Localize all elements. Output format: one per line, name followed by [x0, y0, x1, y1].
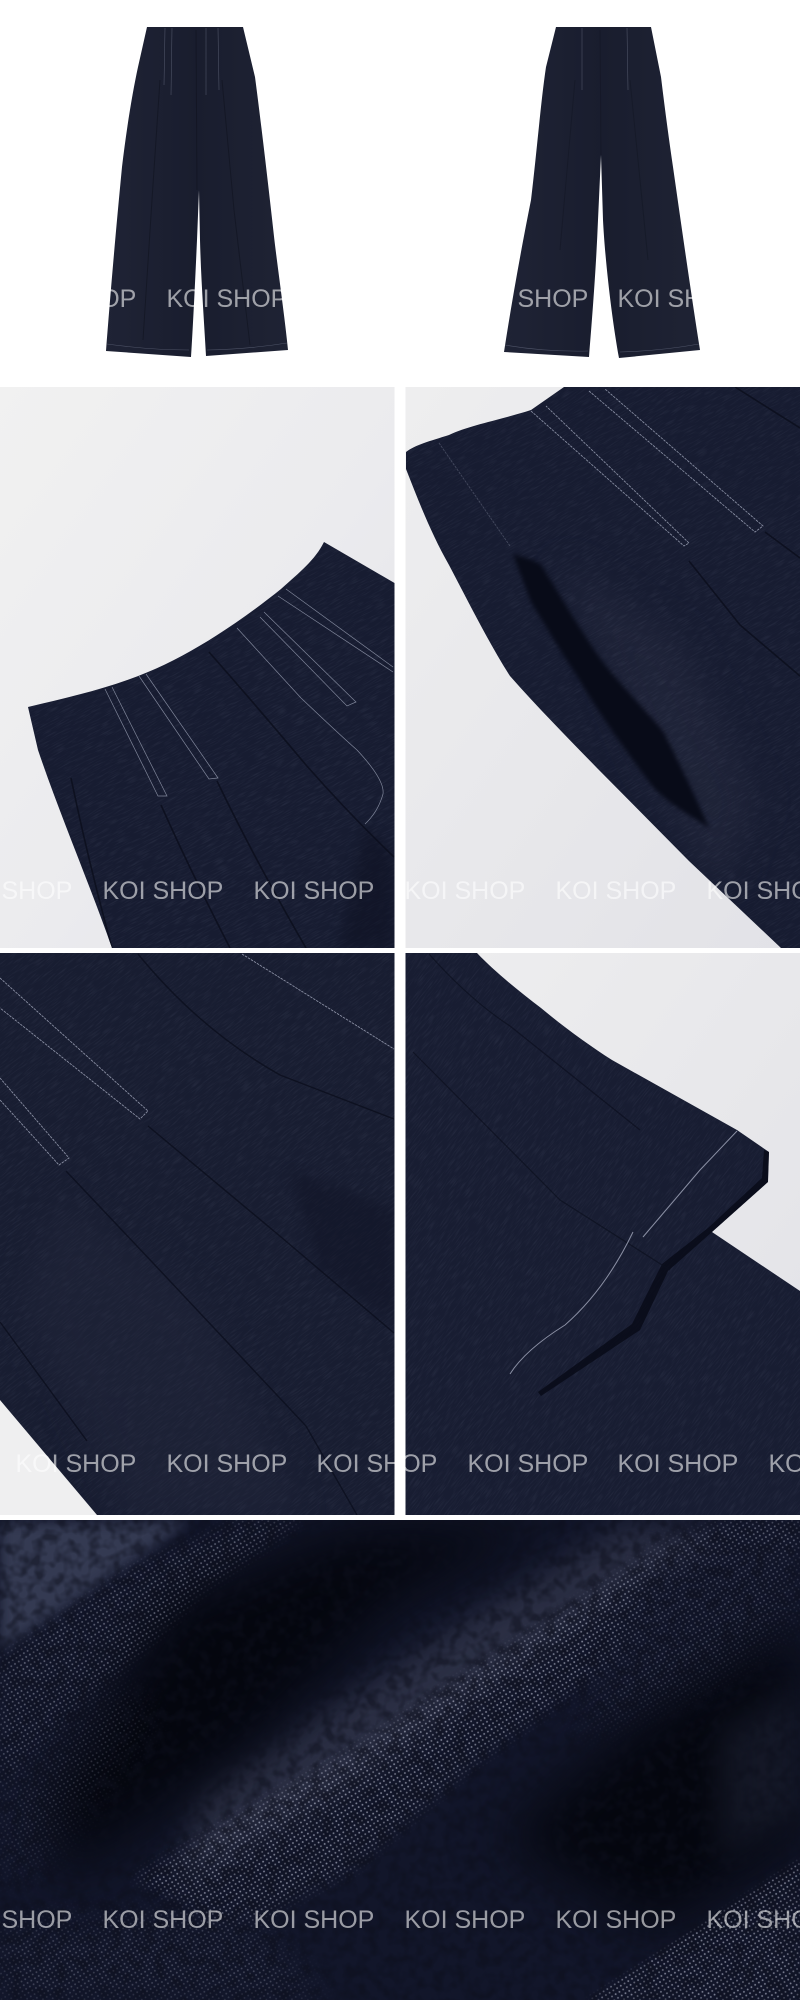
hem stitching [510, 1131, 737, 1374]
watermark row 3: KOI SHOP [316, 1450, 437, 1478]
panel: pleat detail photo [0, 953, 394, 1515]
panel: product photos front and back [16, 27, 800, 358]
watermark row 1: KOI SHOP [618, 285, 738, 313]
panel: waistband detail photo [0, 387, 394, 948]
watermark row 2: KOI SHOP [556, 877, 676, 905]
pleats [689, 387, 800, 676]
watermark row 3: KOI SHOP [468, 1450, 588, 1478]
watermark row 1 [16, 285, 800, 313]
watermark row 1: KOI SHOP [16, 285, 136, 313]
photo: trousers front view [106, 27, 288, 357]
watermark row 2: KOI SHOP [254, 877, 374, 905]
watermark row 2 [0, 877, 800, 905]
watermark row 2: KOI SHOP [404, 877, 525, 905]
watermark row 3: KOI SHOP [618, 1450, 738, 1478]
panel: hem detail photo [406, 953, 800, 1515]
panel: fabric close-up photo [0, 1520, 800, 2000]
topstitching [439, 389, 763, 546]
watermark row 4: KOI SHOP [404, 1906, 525, 1934]
watermark row 1: KOI SHOP [316, 285, 437, 313]
watermark row 3: KOI SHOP [16, 1450, 136, 1478]
pleats [71, 652, 394, 948]
watermark row 4: KOI SHOP [254, 1906, 374, 1934]
watermark row 4: KOI SHOP [102, 1906, 223, 1934]
topstitching [0, 954, 394, 1165]
hem fold shadow [538, 1150, 769, 1396]
topstitching [105, 589, 393, 824]
watermark row 3: KOI SHOP [166, 1450, 287, 1478]
watermark row 4 [0, 1906, 800, 1934]
watermark row 4: KOI SHOP [556, 1906, 676, 1934]
panel: pocket detail photo [406, 387, 800, 948]
photo: trousers back view [504, 27, 700, 358]
pocket opening [513, 554, 709, 828]
watermark row 1: KOI SHOP [468, 285, 588, 313]
watermark row 1: KOI SHOP [166, 285, 287, 313]
watermark row 3 [16, 1450, 800, 1478]
pleats [0, 954, 394, 1515]
watermark row 2: KOI SHOP [102, 877, 223, 905]
denim weave dots [0, 1520, 800, 2000]
